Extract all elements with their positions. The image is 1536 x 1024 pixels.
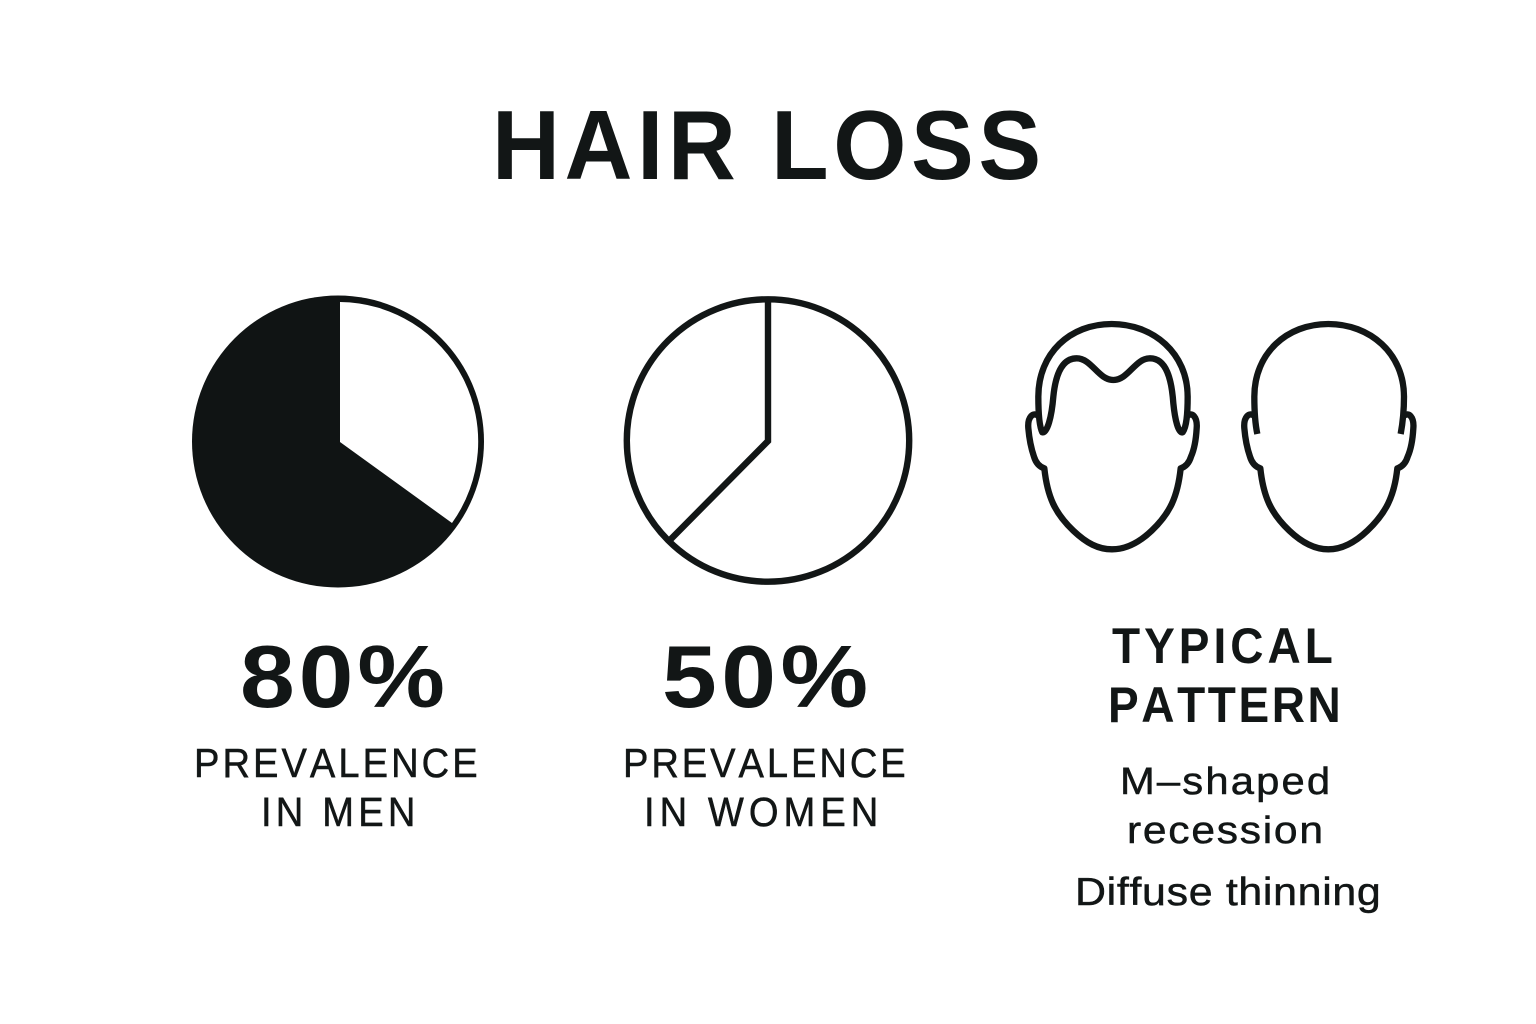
pie chart: 50% women (627, 298, 909, 582)
stat: 50%: 50% (662, 627, 868, 726)
label: prevalence in men (194, 741, 478, 835)
icon: head with M-shaped recession (1028, 324, 1197, 549)
label: prevalence in men: PREVALENCE (194, 741, 478, 786)
stat: 80%: 80% (240, 627, 445, 726)
heading: typical pattern (1108, 619, 1341, 733)
title: HAIR LOSS (492, 91, 1041, 200)
label: prevalence in women (623, 741, 906, 835)
label: prevalence in women: PREVALENCE (623, 741, 906, 786)
panel: prevalence in men (192, 296, 484, 835)
pie chart: 80% men (192, 296, 484, 588)
heading: typical pattern: PATTERN (1108, 678, 1341, 733)
panel: typical pattern (1028, 324, 1413, 914)
text: M-shaped recession: M–shaped (1120, 761, 1330, 803)
label: prevalence in men: IN MEN (261, 790, 415, 835)
text: M-shaped recession: recession (1127, 808, 1323, 851)
text: diffuse thinning: Diffuse thinning (1075, 870, 1381, 914)
icon: head with diffuse thinning (1244, 324, 1413, 549)
heading: typical pattern: TYPICAL (1112, 619, 1333, 674)
text: M-shaped recession (1120, 761, 1330, 851)
label: prevalence in women: IN WOMEN (644, 790, 878, 835)
panel: prevalence in women (623, 298, 909, 835)
